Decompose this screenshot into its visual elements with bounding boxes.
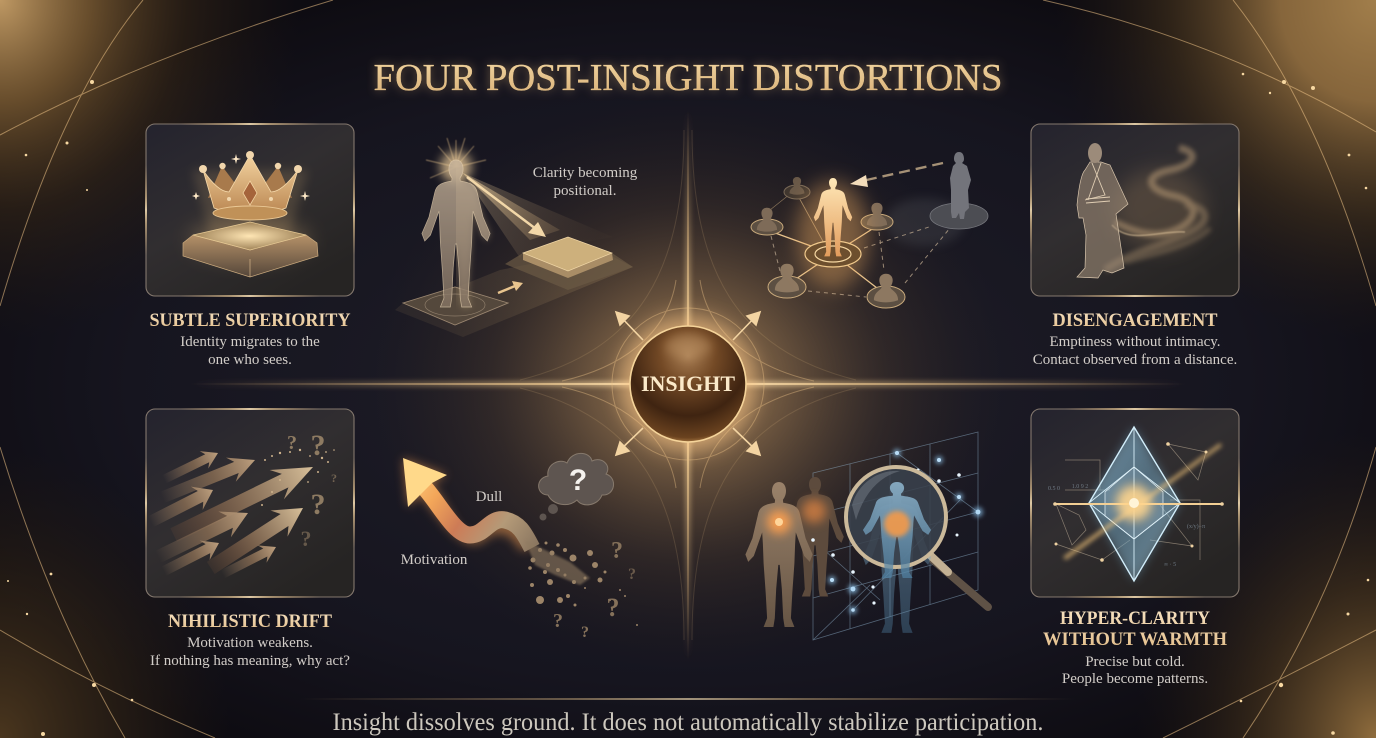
icon: dissolving arrows: ?: [300, 526, 312, 551]
description: Emptiness without intimacy.: [1049, 334, 1221, 350]
icon: dissolving robed figure: [1077, 143, 1210, 278]
label: dull: Dull: [476, 489, 502, 505]
panel: hyper-clarity without warmth: [1030, 408, 1240, 687]
curved star arcs: [520, 130, 856, 640]
heading: NIHILISTIC DRIFT: [168, 611, 332, 632]
icon: crystal with geometry: [1048, 427, 1224, 581]
beam: [463, 173, 613, 258]
floor: [395, 250, 633, 337]
question marks: [553, 538, 636, 641]
card frame: [1031, 124, 1239, 296]
figure: [422, 160, 490, 307]
icon: dissolving arrows: ?: [287, 432, 297, 454]
description: Precise but cold.: [1085, 654, 1185, 670]
icon: dissolving arrows: ?: [310, 429, 326, 462]
heading: WITHOUT WARMTH: [1043, 629, 1227, 650]
icon: dissolving arrows: ?: [310, 488, 326, 521]
thought cloud: [539, 453, 614, 520]
description: Motivation weakens.: [187, 635, 313, 651]
question marks: ?: [611, 538, 623, 564]
description: Identity migrates to the: [180, 334, 320, 350]
arrow shaft: [425, 488, 532, 548]
question marks: ?: [606, 593, 620, 622]
title: FOUR POST-INSIGHT DISTORTIONS: [374, 57, 1002, 99]
thought cloud: ?: [569, 464, 587, 497]
description: one who sees.: [208, 352, 292, 368]
orb: [630, 326, 746, 442]
peers: [751, 177, 905, 308]
arrows: [467, 177, 540, 232]
callout: clarity becoming positional: positional.: [554, 183, 616, 199]
icon: crown on pedestal: [183, 151, 318, 277]
callout: clarity becoming positional: Clarity becoming: [533, 165, 638, 181]
figures: [786, 477, 844, 597]
question marks: ?: [581, 624, 589, 641]
description: Contact observed from a distance.: [1033, 352, 1237, 368]
bottom statement: Insight dissolves ground. It does not automatically stabilize participation.: [332, 709, 1044, 736]
icon: crystal with geometry: (x/y)−π: [1187, 523, 1205, 530]
center person: [797, 181, 869, 289]
illustration: people analyzed through magnifier: [745, 432, 988, 640]
icon: dissolving arrows: ?: [331, 471, 337, 485]
pattern grid: [813, 432, 978, 640]
icon: crystal with geometry: 0.5 0: [1048, 486, 1060, 492]
heading: SUBTLE SUPERIORITY: [150, 310, 351, 331]
icon: crystal with geometry: 1.0 9 2: [1072, 484, 1088, 490]
description: People become patterns.: [1062, 671, 1208, 687]
head rays: [426, 138, 486, 178]
cross rays: [190, 110, 1186, 660]
question marks: ?: [628, 566, 636, 583]
dust: [528, 542, 638, 626]
raised platform: [505, 237, 633, 290]
label: motivation: Motivation: [401, 552, 468, 568]
icon: crystal with geometry: ∞ · 5: [1164, 562, 1176, 568]
icon: dissolving arrows: [145, 429, 337, 583]
title: FOUR POST-INSIGHT DISTORTIONS: [374, 57, 1002, 99]
magnifier: [846, 467, 988, 633]
heading: DISENGAGEMENT: [1052, 310, 1218, 331]
illustration: network with elevated center: [751, 152, 988, 308]
outward arrows: [616, 312, 760, 455]
panel: subtle superiority: [145, 123, 355, 368]
illustration: figure projecting onto pedestal: [395, 138, 633, 337]
panel: disengagement: [1030, 123, 1240, 368]
card frame: [146, 124, 354, 296]
description: If nothing has meaning, why act?: [150, 653, 350, 669]
center: insight orb with rays: [190, 110, 1186, 660]
nodes: [811, 451, 980, 612]
illustration: motivation arrow fading to dust: [403, 453, 638, 641]
distant shadow: [885, 198, 965, 246]
question marks: ?: [553, 610, 563, 632]
connections: [767, 190, 886, 295]
detached observer: [930, 203, 988, 229]
orb label: INSIGHT: [641, 371, 735, 396]
heading: HYPER-CLARITY: [1060, 608, 1210, 629]
card frame: [146, 409, 354, 597]
panel: nihilistic drift: [145, 408, 355, 669]
arrow head: [403, 458, 447, 507]
card frame: [1031, 409, 1239, 597]
dashed arrow: [862, 163, 943, 181]
arrow glow: [403, 458, 532, 550]
